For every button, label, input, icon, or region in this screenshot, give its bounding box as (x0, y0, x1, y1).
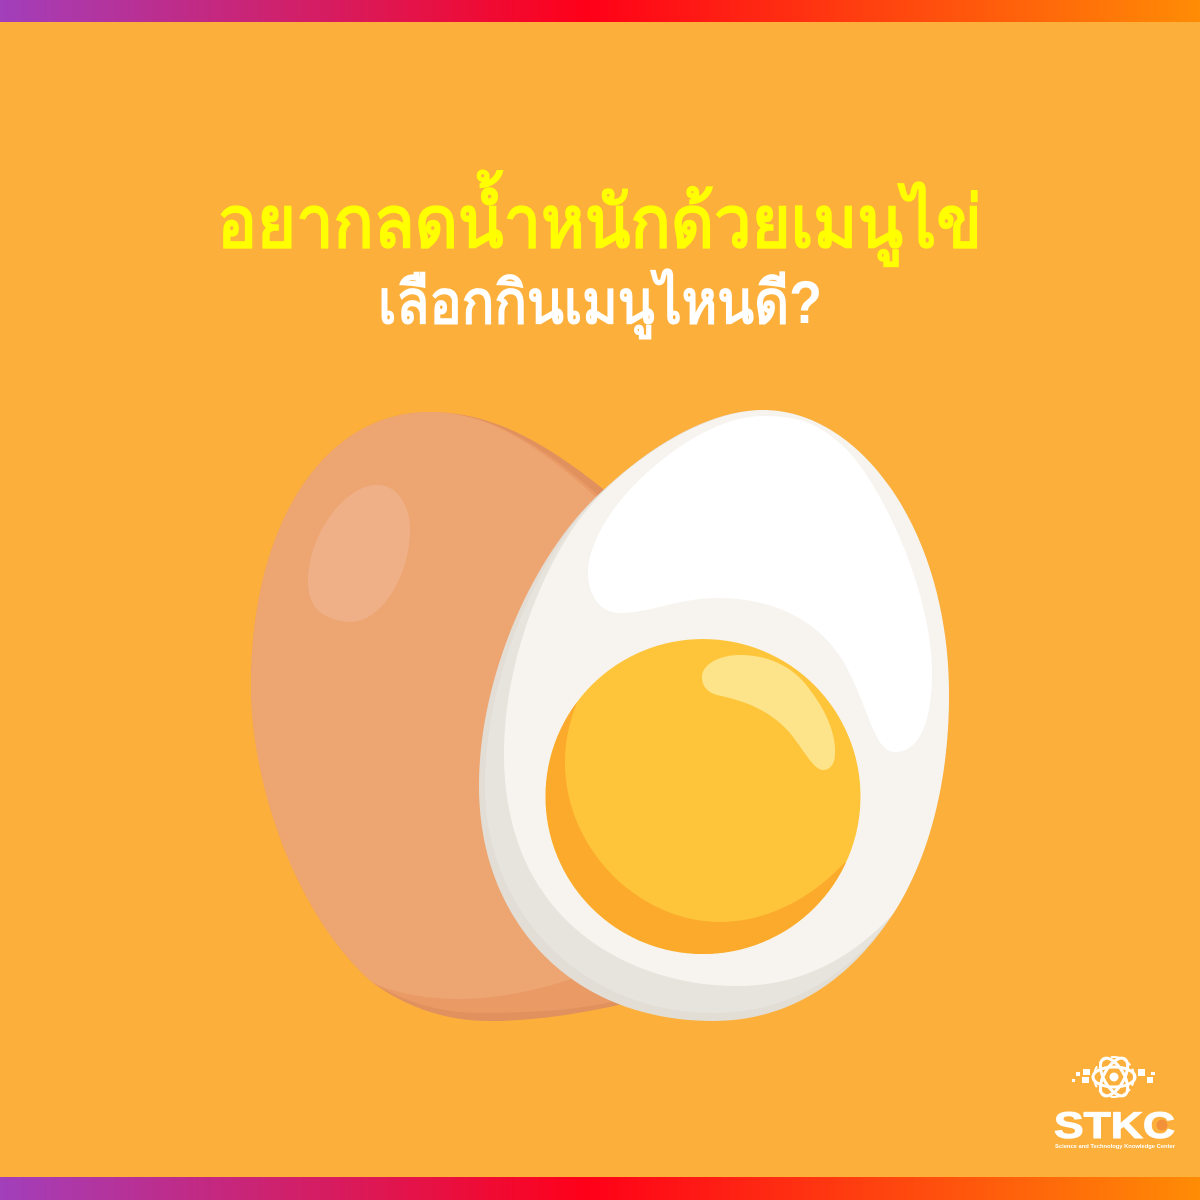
egg white highlight (588, 416, 932, 752)
yolk highlight (702, 655, 835, 770)
egg highlight (308, 485, 410, 622)
title: yellow headline: อยากลดน้ำหนักด้วยเมนูไข่ (217, 169, 982, 268)
logo tagline: Science and Technology Knowledge Center (1055, 1144, 1175, 1150)
logo wordmark: STKC (1054, 1105, 1175, 1146)
logo orange dot (1156, 1120, 1168, 1130)
icon: halved boiled egg (479, 410, 949, 1021)
logo atom icon (1093, 1054, 1135, 1100)
logo pixel squares (1072, 1069, 1155, 1083)
egg white surface (504, 410, 949, 986)
egg white shaded rim (485, 410, 949, 1013)
logo: STKC (1054, 1054, 1175, 1150)
yolk (546, 639, 860, 954)
icon: brown egg (251, 412, 640, 1021)
top gradient bar (0, 0, 1200, 22)
yolk shadow crescent (546, 703, 846, 954)
bottom gradient bar (0, 1177, 1200, 1200)
subtitle: white question: เลือกกินเมนูไหนดี? (378, 267, 822, 340)
